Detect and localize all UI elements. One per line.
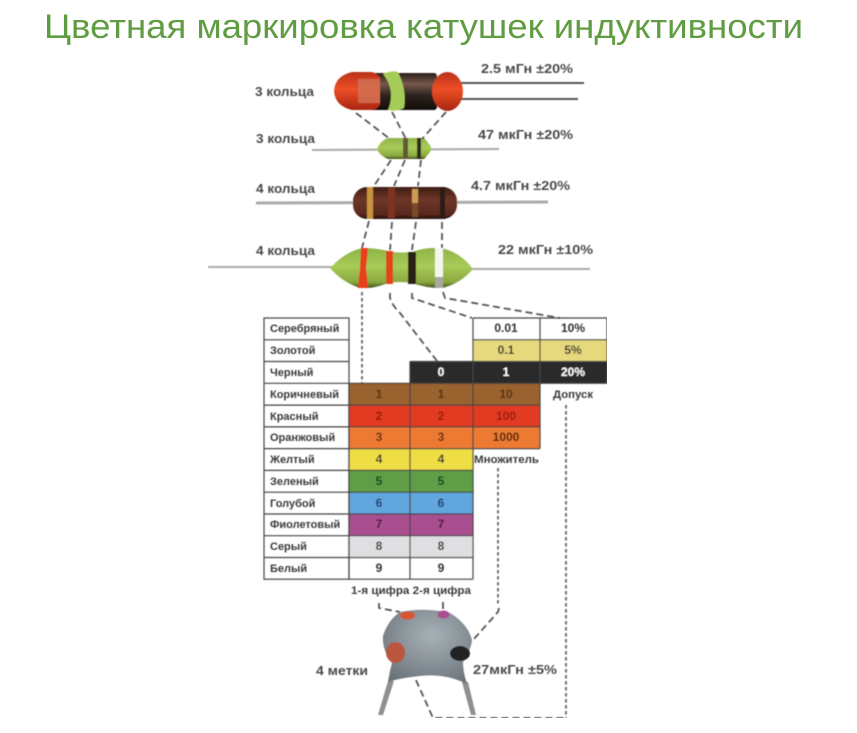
multiplier column: 100: [496, 409, 516, 423]
label: 3 rings: 3 кольца: [256, 131, 316, 146]
color names: [269, 323, 340, 575]
multiplier column: 0.1: [498, 343, 515, 357]
first digit column: 5: [376, 474, 383, 488]
diagram: [208, 61, 607, 718]
second digit column: 2: [438, 409, 445, 423]
first digit column: 3: [376, 430, 383, 444]
multiplier column: 1000: [493, 430, 520, 444]
label: first and second digit: 1-я цифра 2-я цифра: [351, 585, 472, 597]
value: 2.5 mH: 2.5 мГн ±20%: [481, 61, 573, 76]
multiplier column: 1: [503, 365, 510, 379]
color names: Оранжовый: [270, 432, 335, 444]
table grid: [264, 318, 607, 579]
second digit column: 3: [438, 430, 445, 444]
value: 27 uH: 27мкГн ±5%: [473, 662, 557, 677]
second digit column: 5: [438, 474, 445, 488]
second digit column: 6: [438, 496, 445, 510]
second digit column: 0: [438, 365, 445, 379]
color names: Фиолетовый: [270, 519, 340, 531]
color names: Красный: [270, 411, 318, 423]
value: 4.7 uH: 4.7 мкГн ±20%: [471, 178, 570, 193]
color names: Коричневый: [270, 389, 339, 401]
tolerance column: 10%: [561, 321, 585, 335]
color names: Серый: [270, 541, 307, 553]
title: Цветная маркировка катушек индуктивности: [44, 8, 803, 46]
first digit column: 7: [376, 517, 383, 531]
color code table: [264, 318, 607, 579]
color names: Зеленый: [270, 476, 319, 488]
second digit column: 4: [438, 452, 445, 466]
first digit column: [376, 387, 383, 575]
value: 47 uH: 47 мкГн ±20%: [478, 127, 573, 142]
first digit column: 2: [376, 409, 383, 423]
inductor 3: 4 rings, 4.7 uH: [256, 187, 548, 219]
multiplier column: 10: [499, 387, 513, 401]
color names: Желтый: [269, 454, 315, 466]
label: tolerance: Допуск: [553, 389, 593, 401]
second digit column: 8: [438, 539, 445, 553]
tolerance column: 20%: [561, 365, 585, 379]
multiplier column: 0.01: [494, 321, 518, 335]
inductor 4: 4 rings, 22 uH: [208, 248, 590, 288]
label: 4 rings: 4 кольца: [256, 243, 316, 258]
tolerance column: 5%: [564, 343, 582, 357]
dashed connectors between inductors: [356, 112, 560, 384]
first digit column: 9: [376, 561, 383, 575]
label: 3 rings: 3 кольца: [255, 84, 315, 99]
color names: Золотой: [270, 345, 315, 357]
second digit column: [438, 365, 445, 575]
value: 22 uH: 22 мкГн ±10%: [498, 242, 593, 257]
label: multiplier: Множитель: [474, 454, 539, 466]
row colors: [349, 340, 607, 558]
first digit column: 8: [376, 539, 383, 553]
second digit column: 7: [438, 517, 445, 531]
tolerance column: [561, 321, 585, 379]
color names: Черный: [270, 367, 313, 379]
multiplier column: [493, 321, 520, 444]
first digit column: 1: [376, 387, 383, 401]
second digit column: 9: [438, 561, 445, 575]
label: 4 marks: 4 метки: [316, 663, 368, 678]
first digit column: 6: [376, 496, 383, 510]
four-dot inductor: [378, 610, 476, 715]
first digit column: 4: [376, 452, 383, 466]
second digit column: 1: [438, 387, 445, 401]
color names: Голубой: [270, 498, 315, 510]
inductor 2: 3 rings, 47 uH: [312, 138, 499, 159]
inductor 1: 3 rings, 2.5 mH: [334, 71, 584, 111]
label: 4 rings: 4 кольца: [256, 181, 316, 196]
color names: Серебряный: [270, 323, 339, 335]
color names: Белый: [270, 563, 307, 575]
dashed connectors to capacitor: [379, 405, 566, 718]
